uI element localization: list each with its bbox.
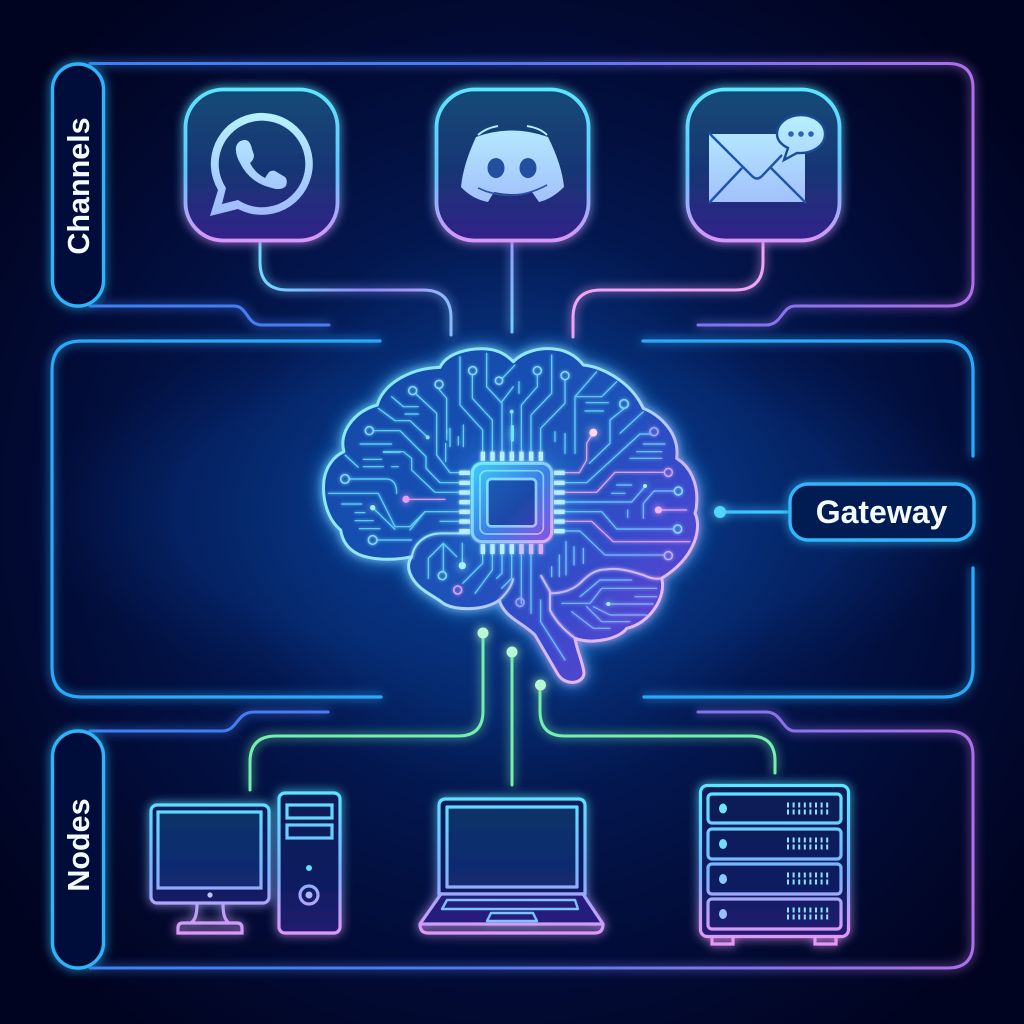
circuit traces	[328, 353, 674, 660]
connector: email to brain	[573, 243, 763, 337]
brain halo	[324, 349, 698, 682]
server vents	[787, 805, 829, 917]
label: Gateway: Gateway	[816, 494, 948, 530]
icon: desktop computer	[151, 793, 340, 933]
label: Gateway	[790, 484, 974, 540]
icon: Discord	[436, 90, 588, 240]
icon: server rack	[700, 786, 848, 944]
connector: laptop to brain	[506, 646, 518, 785]
icon: email with chat bubble	[688, 90, 840, 240]
label: Nodes: Nodes	[62, 798, 96, 892]
pink traces	[410, 433, 690, 542]
chip	[472, 463, 552, 542]
panel: channels frame	[90, 64, 973, 325]
panel: gateway frame	[52, 341, 973, 697]
connector: brain to Gateway	[714, 506, 790, 518]
brain with circuit chip	[324, 349, 698, 682]
label: Channels: Channels	[62, 117, 96, 255]
chip pins	[459, 452, 565, 554]
monitor	[151, 805, 269, 903]
circuit nodes	[341, 367, 682, 606]
glowing dots	[370, 410, 662, 606]
icon: WhatsApp	[186, 90, 338, 240]
inner lobes	[412, 533, 662, 638]
connector: Discord to brain	[510, 243, 514, 332]
brain outline	[324, 349, 698, 682]
panel: nodes frame	[90, 712, 973, 968]
connector: WhatsApp to brain	[260, 243, 451, 335]
tower	[279, 793, 340, 933]
chip glow	[455, 446, 569, 559]
connector: server to brain	[535, 680, 775, 773]
connector: desktop to brain	[250, 628, 488, 790]
label: Channels	[52, 64, 104, 306]
icon: laptop	[420, 799, 603, 933]
label: Nodes	[52, 731, 104, 968]
